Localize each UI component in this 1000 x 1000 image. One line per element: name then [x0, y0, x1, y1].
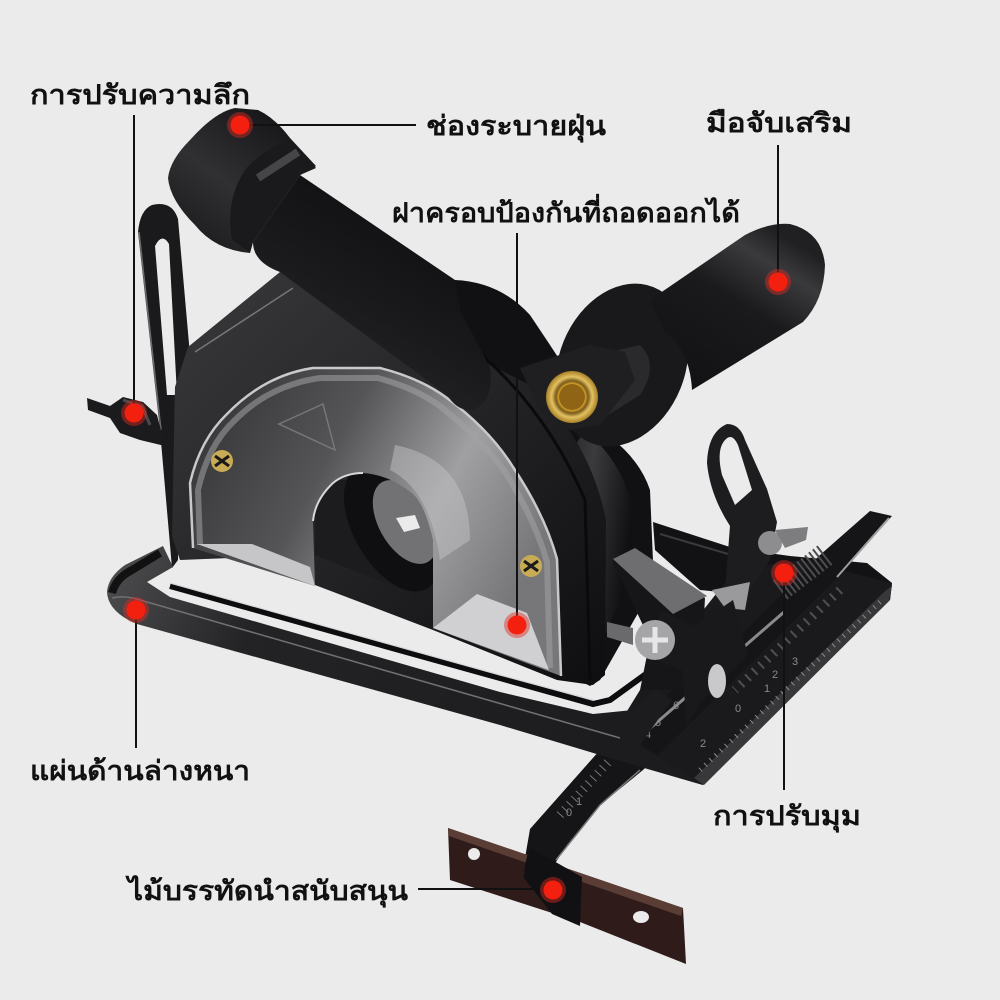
- rear rail of base: [653, 522, 892, 600]
- red marker dots: [121, 112, 797, 903]
- support guide plate: [448, 828, 686, 964]
- ruler numerals: 0: [566, 807, 572, 819]
- ruler numerals: 5: [655, 717, 661, 729]
- transparent blade cover: [190, 368, 561, 676]
- auxiliary handle: [532, 264, 712, 466]
- ruler numerals: 2: [772, 669, 778, 681]
- ruler numerals: 2: [700, 738, 706, 750]
- ruler numerals: 1: [764, 683, 770, 695]
- ruler numerals: 0: [735, 703, 741, 715]
- guard body: [172, 272, 606, 685]
- label: auxiliary handle: มือจับเสริม: [706, 108, 852, 138]
- gray link arm: [613, 548, 707, 614]
- dark mount under link arm: [612, 560, 705, 690]
- label: angle adjustment: การปรับมุม: [713, 801, 861, 833]
- inner drive ring: [315, 448, 460, 608]
- dust port cylinder: [168, 108, 316, 253]
- flange disc: [532, 264, 712, 466]
- extraction tube: [253, 175, 491, 410]
- base front rail: [107, 546, 703, 785]
- label: thick base plate: แผ่นด้านล่างหนา: [30, 756, 250, 786]
- handle grip: [597, 224, 825, 415]
- base plate with scale: [600, 560, 892, 785]
- label: depth adjustment: การปรับความลึก: [30, 80, 250, 110]
- depth slot arm: [138, 204, 190, 568]
- ruler numerals: 3: [792, 656, 798, 668]
- label: dust port: ช่องระบายฝุ่น: [426, 111, 607, 143]
- handle mount and brass nut: [520, 345, 635, 430]
- ruler numerals: [566, 656, 798, 819]
- label: support ruler: ไม้บรรทัดนำสนับสนุน: [125, 875, 409, 908]
- ruler numerals: 1: [576, 796, 582, 808]
- label: removable guard: ฝาครอบป้องกันที่ถอดออกได้: [392, 193, 740, 228]
- angle bracket: [707, 424, 808, 610]
- ruler numerals: 6: [673, 700, 679, 712]
- depth knob: [87, 397, 165, 446]
- guard rear shell: [455, 280, 654, 686]
- ruler numerals: 4: [645, 729, 651, 741]
- dust port: [253, 175, 491, 410]
- product: angle grinder cutting stand: [87, 108, 892, 964]
- adjustable ruler: [525, 511, 892, 880]
- angle adjuster: [612, 560, 705, 690]
- front bracket with screw: [607, 600, 748, 725]
- cover screws: [211, 450, 542, 577]
- leader lines: [134, 115, 784, 889]
